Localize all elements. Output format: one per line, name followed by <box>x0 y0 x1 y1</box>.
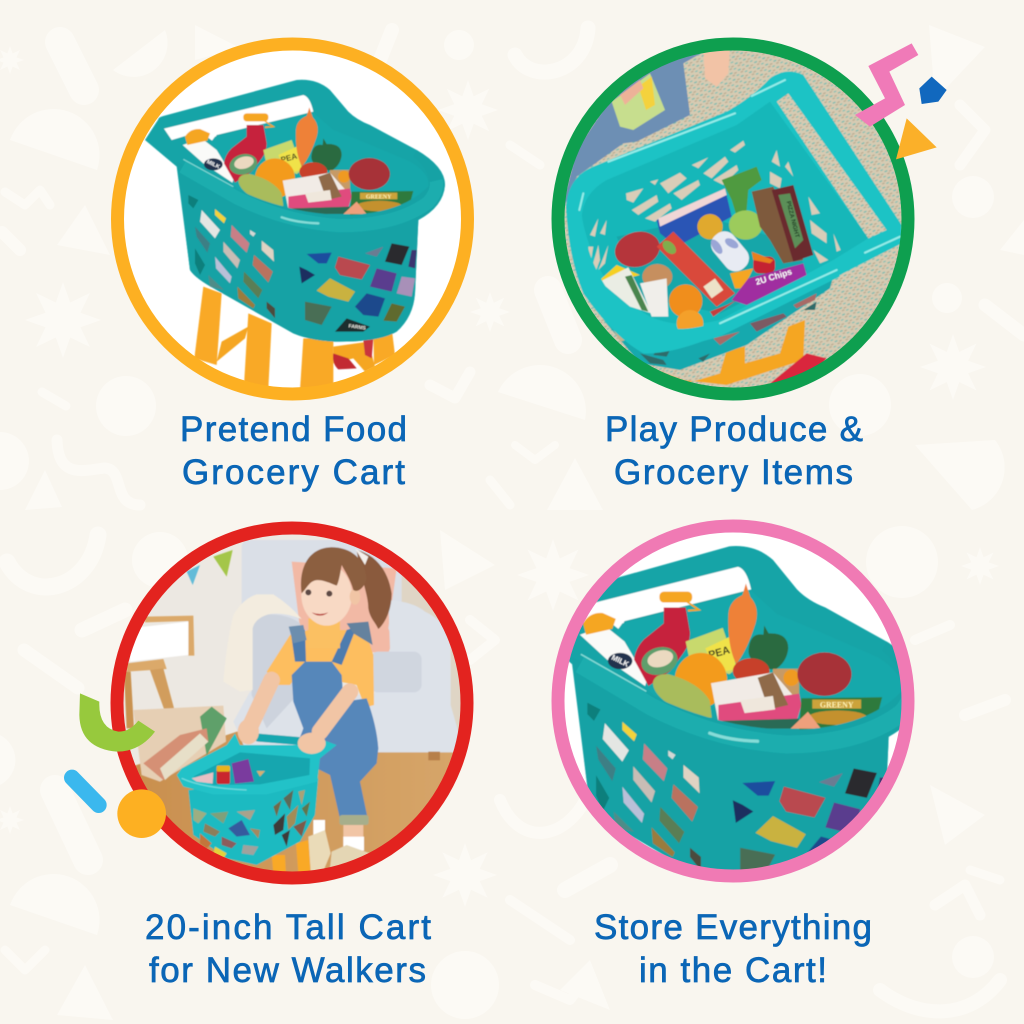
girl <box>250 547 392 871</box>
ring: red <box>117 528 467 878</box>
caption: Store Everything <box>594 908 872 947</box>
ring: amber <box>118 44 468 394</box>
cart front and rim <box>177 150 445 342</box>
panel: play produce and grocery items <box>540 30 947 492</box>
hair <box>301 547 367 593</box>
caption: for New Walkers <box>149 951 426 990</box>
icon: amber dot <box>117 789 166 838</box>
small cart <box>177 733 337 873</box>
ring: green <box>558 44 908 394</box>
groceries from above: PIZZA NIGHT <box>785 201 800 239</box>
caption: Pretend Food <box>180 410 407 449</box>
rug <box>564 50 902 388</box>
icon: amber triangle <box>896 118 937 159</box>
photo circle: cart close up <box>564 532 902 870</box>
shirt <box>267 630 374 708</box>
bunting <box>213 550 233 577</box>
wire basket with books <box>133 706 226 782</box>
photo circle: cart with food <box>124 50 461 388</box>
cart shell <box>145 80 445 342</box>
icon: green arc <box>79 693 155 752</box>
face <box>301 564 352 626</box>
wall openings <box>588 141 841 273</box>
rim front over items <box>588 250 840 340</box>
icon: pink zigzag <box>855 43 918 127</box>
photo circle: toddler pushing cart <box>124 534 460 872</box>
cart legs <box>194 287 395 390</box>
caption <box>180 410 407 492</box>
caption <box>145 908 431 990</box>
groceries <box>183 107 413 218</box>
child legs and held can <box>560 50 730 217</box>
side table <box>145 616 194 656</box>
cart interior <box>582 102 868 324</box>
rim highlights <box>579 80 900 323</box>
hands on handle <box>238 719 259 744</box>
groceries: MILK <box>206 159 221 171</box>
legs and shoes <box>313 820 325 837</box>
panel: pretend food grocery cart <box>110 36 475 492</box>
overalls <box>292 662 378 819</box>
cart close-up <box>569 545 902 870</box>
caption: Play Produce & <box>605 410 863 449</box>
caption: in the Cart! <box>639 951 827 990</box>
ponytail <box>357 550 392 629</box>
neck, arms <box>308 618 340 648</box>
lattice holes <box>193 790 310 858</box>
ring: pink <box>558 526 908 876</box>
caption: 20-inch Tall Cart <box>145 908 431 947</box>
groceries from above <box>600 167 813 337</box>
decorative shapes: zigzag, pentagon, triangle <box>855 43 947 159</box>
panel: 20-inch tall cart <box>72 520 477 990</box>
caption <box>594 908 872 990</box>
icon: blue bar <box>72 778 99 805</box>
groceries: GREENY <box>366 194 392 200</box>
decorative shapes: arc, bar, dot <box>72 693 166 838</box>
items in small cart <box>217 767 230 784</box>
groceries: PEA <box>280 152 298 165</box>
room background <box>124 540 477 882</box>
caption: Grocery Items <box>614 453 853 492</box>
basket lattice openings <box>188 195 417 332</box>
icon: blue pentagon <box>919 77 947 104</box>
basket lattice openings: FARMS <box>348 323 367 332</box>
cart rim shell <box>566 72 902 353</box>
cart illustration <box>145 80 445 390</box>
groceries from above: 2U Chips <box>754 266 793 287</box>
panel: store everything in the cart <box>531 518 924 990</box>
caption <box>605 410 863 492</box>
caption: Grocery Cart <box>182 453 405 492</box>
lower lattice and legs <box>657 320 805 385</box>
photo circle: overhead view of cart on rug <box>564 50 902 388</box>
